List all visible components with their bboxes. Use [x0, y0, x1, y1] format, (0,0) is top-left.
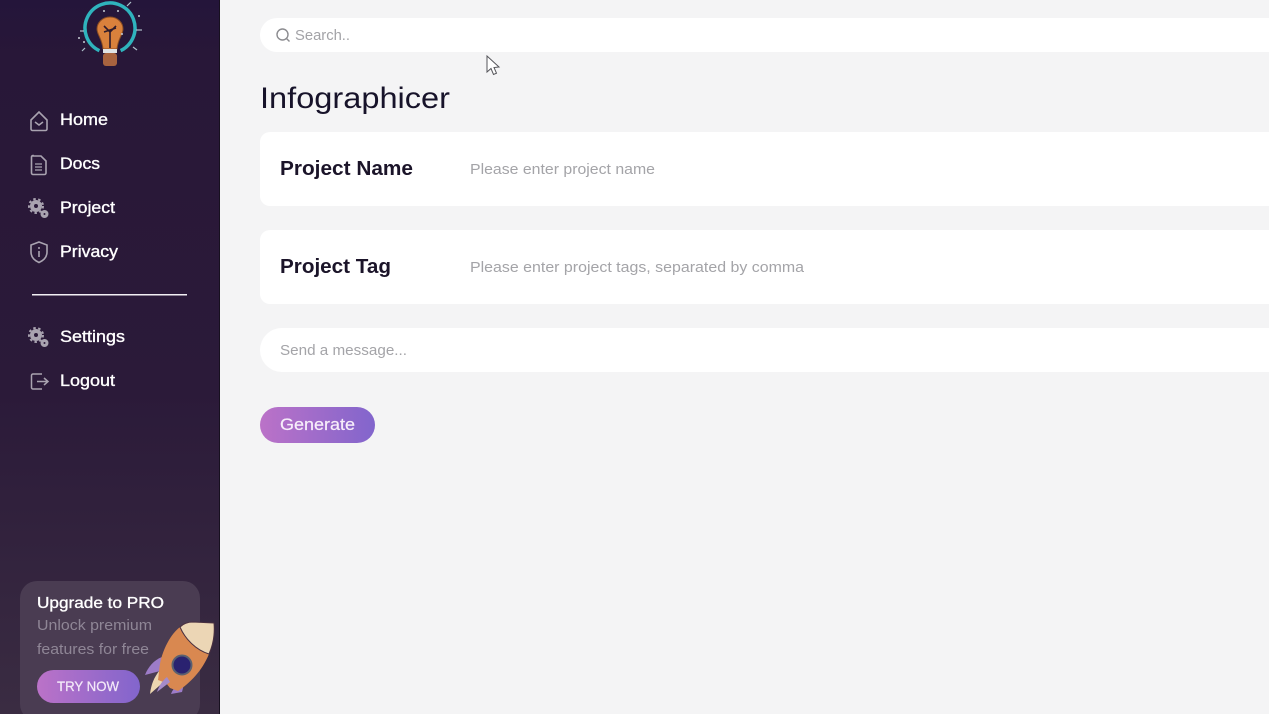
nav item: Project: Project	[60, 198, 115, 217]
search bar: Search..	[295, 28, 350, 44]
nav item: Project	[29, 198, 115, 217]
button: try now: TRY NOW	[57, 678, 120, 694]
button: generate: Generate	[280, 415, 355, 434]
panel: project name field: Please enter project name	[470, 162, 655, 178]
icon: magnifier	[277, 29, 290, 42]
nav item: Home: Home	[60, 110, 108, 129]
icon: light bulb logo	[77, 0, 143, 66]
nav item: Settings: Settings	[60, 327, 125, 346]
title: Infographicer	[260, 82, 450, 115]
nav item: Privacy: Privacy	[60, 242, 119, 261]
panel: upgrade card	[20, 581, 214, 714]
panel: project tag field: Please enter project tags, separated by comma	[470, 260, 805, 276]
message input: Send a message...	[280, 343, 407, 359]
nav item: Logout: Logout	[60, 371, 115, 390]
text: upgrade description: Unlock premium	[37, 617, 152, 634]
button: generate	[260, 407, 375, 443]
nav item: Docs	[32, 154, 100, 174]
text: upgrade description: features for free	[37, 641, 149, 658]
panel: project name field	[260, 132, 1269, 206]
heading: upgrade: Upgrade to PRO	[37, 595, 164, 612]
panel: sidebar	[0, 0, 220, 714]
search bar	[260, 18, 1269, 52]
icon: mouse cursor	[487, 56, 499, 74]
nav item: Docs: Docs	[60, 154, 100, 173]
nav item: Home	[31, 110, 108, 130]
nav item: Logout	[32, 371, 115, 390]
panel: project name field: Project Name	[280, 158, 413, 180]
button: try now	[37, 670, 140, 703]
icon: rocket	[145, 622, 214, 694]
panel: project tag field	[260, 230, 1269, 304]
text: upgrade description	[37, 617, 152, 658]
nav item: Privacy	[31, 242, 119, 262]
message input	[260, 328, 1269, 372]
nav item: Settings	[29, 327, 125, 346]
panel: project tag field: Project Tag	[280, 256, 391, 278]
